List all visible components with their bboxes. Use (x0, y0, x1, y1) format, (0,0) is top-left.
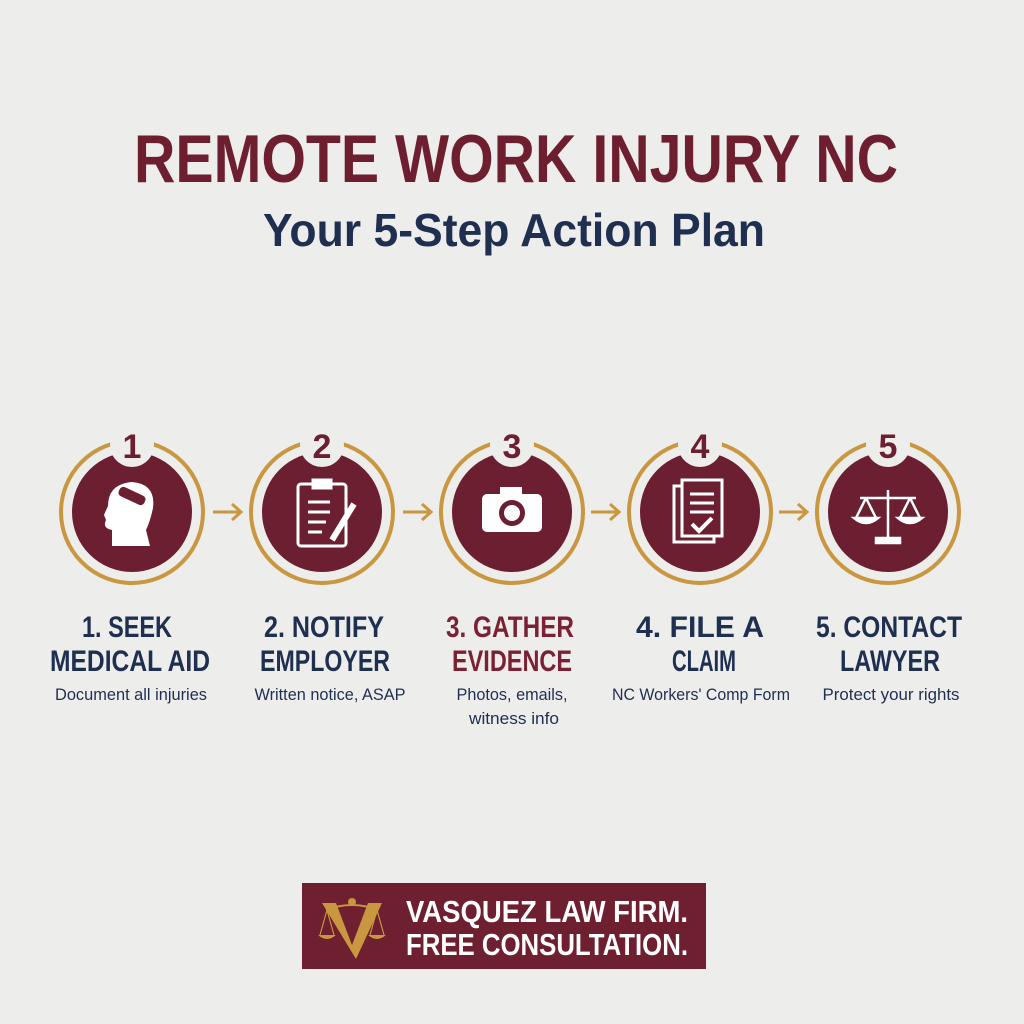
step labels (50, 611, 962, 678)
title: REMOTE WORK INJURY NC (134, 121, 898, 197)
step 2 (251, 423, 393, 583)
icon: head with bandage (104, 482, 153, 546)
step 5 (817, 423, 959, 583)
banner (302, 883, 706, 969)
arrow 3 (591, 504, 619, 520)
step descriptions: Photos, emails, (456, 685, 568, 704)
step labels: 1. SEEK (82, 611, 172, 644)
step labels: EVIDENCE (452, 645, 572, 678)
icon: scales (854, 490, 922, 543)
step 1 (61, 423, 203, 583)
subtitle: Your 5-Step Action Plan (263, 204, 765, 256)
step labels: LAWYER (840, 645, 940, 678)
icon: camera (482, 487, 542, 532)
step descriptions: Document all injuries (55, 685, 207, 704)
arrow 4 (779, 504, 807, 520)
step 5: 5 (879, 428, 897, 466)
step descriptions: witness info (468, 709, 559, 728)
step labels: EMPLOYER (260, 645, 390, 678)
step labels: MEDICAL AID (50, 645, 210, 678)
icon: form with check (674, 480, 722, 542)
step 4: 4 (691, 428, 710, 466)
step descriptions: NC Workers' Comp Form (612, 685, 790, 704)
step 4 (629, 423, 771, 583)
arrow 2 (403, 504, 431, 520)
logo: V with scales (318, 898, 386, 959)
icon: clipboard (298, 480, 354, 546)
step descriptions: Protect your rights (822, 685, 960, 704)
step labels: 4. FILE A (636, 611, 764, 644)
step labels: 3. GATHER (446, 611, 574, 644)
step labels: 5. CONTACT (816, 611, 962, 644)
arrow 1 (213, 504, 241, 520)
banner: FREE CONSULTATION. (406, 927, 688, 962)
step 3: 3 (503, 428, 521, 466)
step 1: 1 (123, 428, 141, 466)
step labels: 2. NOTIFY (264, 611, 384, 644)
step 3 (441, 423, 583, 583)
step descriptions: Written notice, ASAP (254, 685, 406, 704)
banner: VASQUEZ LAW FIRM. (406, 894, 688, 929)
step descriptions (55, 685, 960, 728)
step labels: CLAIM (672, 645, 736, 678)
step 2: 2 (313, 428, 331, 466)
